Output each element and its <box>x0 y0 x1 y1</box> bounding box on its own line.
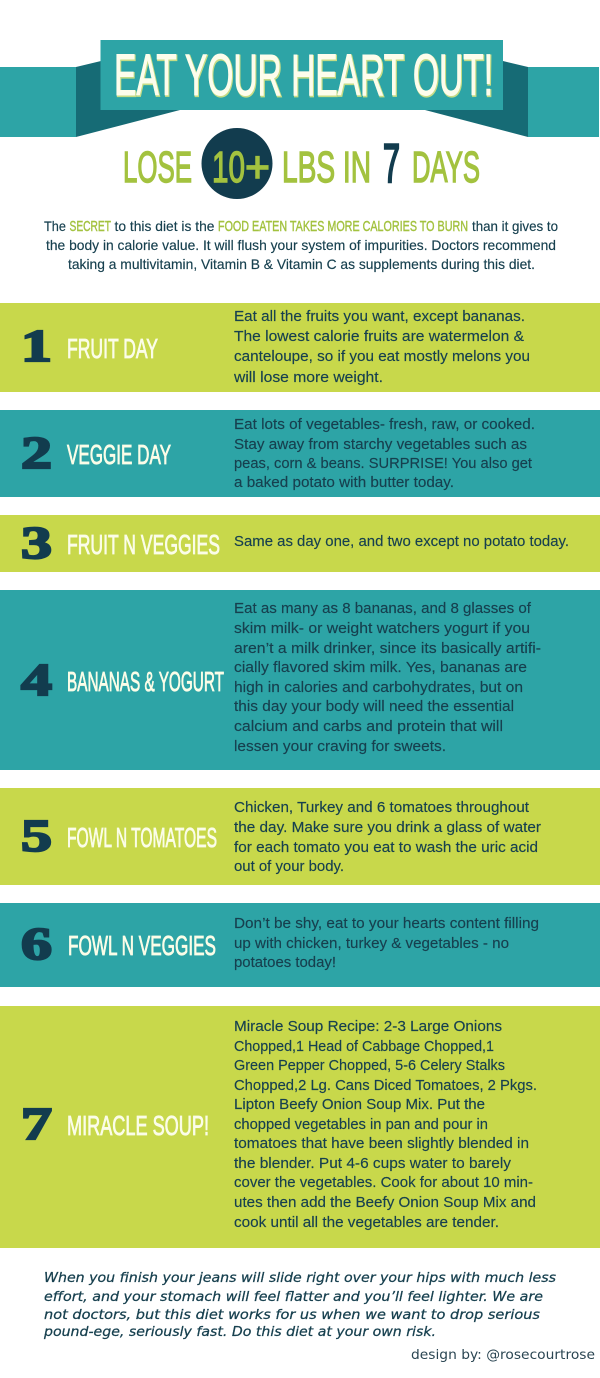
subtitle: 10 <box>212 143 245 192</box>
closing note: effort, and your stomach will feel flatter and you’ll feel lighter. We are <box>44 1290 543 1305</box>
description <box>233 309 530 386</box>
description: Chicken, Turkey and 6 tomatoes throughout <box>234 800 529 816</box>
description: cially flavored skim milk. Yes, bananas are <box>234 660 527 676</box>
subtitle <box>123 128 480 199</box>
description: Eat all the fruits you want, except bananas. <box>234 309 525 325</box>
description: peas, corn & beans. SURPRISE! You also get <box>234 456 532 472</box>
intro text: FOOD EATEN TAKES MORE CALORIES TO BURN <box>218 219 468 235</box>
description: will lose more weight. <box>233 370 383 386</box>
description: this day your body will need the essential <box>234 699 514 715</box>
description: high in calories and carbohydrates, but on <box>234 680 523 696</box>
description: for each tomato you eat to wash the uric acid <box>234 840 538 856</box>
panel: day 6 fowl n veggies <box>0 903 600 987</box>
description: Miracle Soup Recipe: 2-3 Large Onions <box>234 1019 502 1035</box>
subtitle: + <box>245 143 270 192</box>
description <box>234 916 539 971</box>
description: out of your body. <box>234 859 344 875</box>
description: Don’t be shy, eat to your hearts content filling <box>234 916 539 932</box>
description <box>234 800 541 875</box>
intro text: The <box>44 219 66 234</box>
heading: FOWL N VEGGIES <box>68 930 216 961</box>
closing note <box>43 1271 556 1340</box>
intro text: taking a multivitamin, Vitamin B & Vitamin C as supplements during this diet. <box>68 257 535 272</box>
description: Eat lots of vegetables- fresh, raw, or cooked. <box>234 417 535 433</box>
intro text: than it gives to <box>472 219 558 234</box>
description: calcium and carbs and protein that will <box>234 719 503 735</box>
heading: FRUIT DAY <box>67 333 158 364</box>
subtitle: LBS IN <box>282 143 371 192</box>
description: skim milk- or weight watchers yogurt if you <box>234 621 530 637</box>
subtitle: 7 <box>383 132 400 194</box>
description: canteloupe, so if you eat mostly melons you <box>234 349 530 365</box>
panel: day 3 fruit n veggies <box>0 515 600 572</box>
intro text <box>44 219 558 272</box>
heading: FOWL N TOMATOES <box>67 822 217 853</box>
description: Chopped,1 Head of Cabbage Chopped,1 <box>234 1039 494 1055</box>
description: up with chicken, turkey & vegetables - no <box>234 936 509 952</box>
intro text: to this diet is the <box>114 219 214 234</box>
description: Lipton Beefy Onion Soup Mix. Put the <box>234 1097 485 1113</box>
description: Chopped,2 Lg. Cans Diced Tomatoes, 2 Pkgs. <box>234 1078 537 1094</box>
description: tomatoes that have been slightly blended in <box>234 1136 529 1152</box>
description: aren’t a milk drinker, since its basically artifi- <box>234 641 541 657</box>
description: utes then add the Beefy Onion Soup Mix and <box>234 1195 536 1211</box>
panel: day 5 fowl n tomatoes <box>0 788 600 885</box>
heading: BANANAS & YOGURT <box>67 666 224 697</box>
heading: MIRACLE SOUP! <box>67 1110 209 1141</box>
number 5: 5 <box>21 810 52 861</box>
heading: FRUIT N VEGGIES <box>67 529 220 560</box>
number 1: 1 <box>21 320 52 371</box>
description: Green Pepper Chopped, 5-6 Celery Stalks <box>234 1058 505 1074</box>
design credit: design by: @rosecourtrose <box>411 1347 595 1363</box>
description: cover the vegetables. Cook for about 10 min- <box>234 1175 533 1191</box>
ribbon banner <box>0 40 599 137</box>
number 2: 2 <box>21 427 52 478</box>
number 3: 3 <box>21 517 52 568</box>
panel: day 7 miracle soup <box>0 1006 600 1248</box>
intro text: SECRET <box>70 219 111 235</box>
description: potatoes today! <box>234 955 336 971</box>
panel: day 2 veggie day <box>0 410 600 497</box>
description: Stay away from starchy vegetables such as <box>234 437 527 453</box>
description: the day. Make sure you drink a glass of water <box>234 820 541 836</box>
heading: VEGGIE DAY <box>67 439 171 470</box>
subtitle: LOSE <box>123 143 192 192</box>
description <box>234 417 535 491</box>
number 7: 7 <box>21 1098 52 1149</box>
description: lessen your craving for sweets. <box>234 739 446 755</box>
panel: day 4 bananas and yogurt <box>0 590 600 770</box>
number 4: 4 <box>21 654 52 705</box>
subtitle: DAYS <box>412 143 480 192</box>
intro text: the body in calorie value. It will flush your system of impurities. Doctors recommend <box>46 238 556 253</box>
description <box>234 1019 537 1231</box>
closing note: pound-ege, seriously fast. Do this diet at your own risk. <box>43 1325 436 1340</box>
description: chopped vegetables in pan and pour in <box>234 1117 488 1133</box>
number 6: 6 <box>21 918 52 969</box>
description: cook until all the vegetables are tender. <box>234 1215 499 1231</box>
closing note: not doctors, but this diet works for us when we want to drop serious <box>44 1308 540 1323</box>
description: Eat as many as 8 bananas, and 8 glasses of <box>234 601 532 617</box>
description: The lowest calorie fruits are watermelon & <box>234 329 524 345</box>
description: Same as day one, and two except no potato today. <box>234 534 569 550</box>
description: the blender. Put 4-6 cups water to barely <box>234 1156 512 1172</box>
closing note: When you finish your jeans will slide right over your hips with much less <box>44 1271 556 1286</box>
description <box>234 601 541 755</box>
panel: day 1 fruit day <box>0 303 600 392</box>
description: a baked potato with butter today. <box>234 475 454 491</box>
